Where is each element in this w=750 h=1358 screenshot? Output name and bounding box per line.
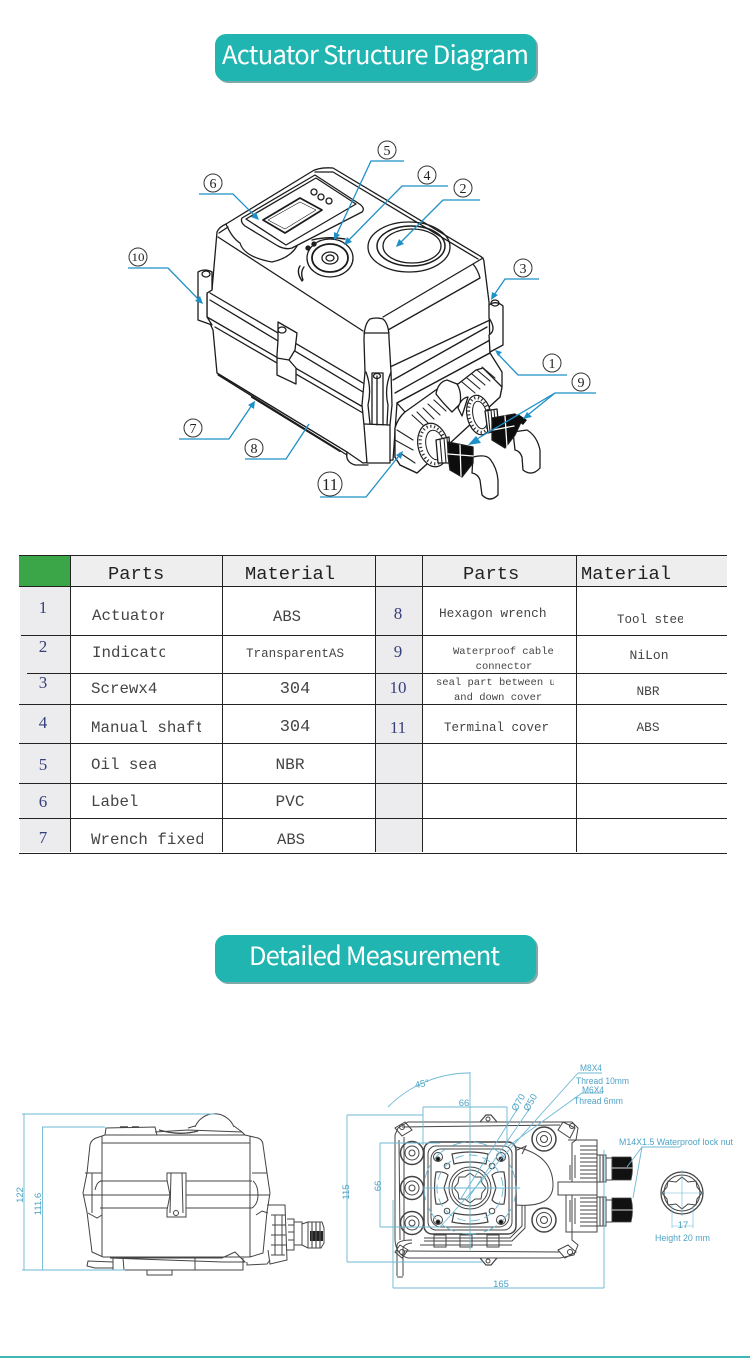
callout 5: 5 — [384, 144, 390, 159]
callout 6: 6 — [210, 177, 216, 192]
large bolts — [400, 1142, 424, 1164]
dimension and leader lines — [347, 1072, 704, 1288]
heading: Detailed Measurement — [215, 935, 538, 984]
table left rows: Manual shaft — [91, 719, 205, 737]
dimension labels: M6X4 — [582, 1085, 604, 1096]
callout 9: 9 — [578, 376, 584, 391]
table right rows: NBR — [636, 685, 660, 699]
callout 5 — [334, 141, 404, 240]
callout 2 — [396, 179, 480, 247]
side view dimension drawing — [15, 1114, 324, 1275]
dimension labels: M14X1.5 Waterproof lock nut — [619, 1137, 733, 1148]
table header: Parts — [463, 563, 519, 585]
table right rows: Hexagon wrench — [439, 606, 547, 621]
bottom view dimension drawing — [341, 1063, 733, 1290]
right lug — [489, 303, 503, 352]
heading: Detailed Measurement: Detailed Measurement — [249, 936, 500, 973]
manual shaft knob — [298, 238, 353, 281]
cable glands — [566, 1140, 597, 1232]
dimension labels: Ø50 — [522, 1092, 540, 1113]
side view actuator outline — [83, 1114, 324, 1275]
table right rows: Tool steel — [617, 613, 692, 627]
terminal cover and glands — [395, 353, 540, 499]
table right rows: and down cover — [454, 692, 542, 704]
table left rows: 1 — [39, 598, 47, 617]
table left rows: 5 — [39, 755, 47, 774]
callout 7 — [179, 401, 255, 439]
table right rows: Waterproof cable — [453, 646, 554, 658]
table left rows — [39, 598, 344, 849]
callout 8: 8 — [250, 442, 258, 457]
dimension labels: 115 — [341, 1184, 352, 1200]
table left rows: Screwx4 — [91, 680, 157, 698]
table left rows: 304 — [280, 718, 310, 737]
table left rows: 2 — [39, 637, 47, 656]
dimension 111.6: 111.6 — [33, 1193, 44, 1215]
callout 1 — [495, 350, 567, 375]
table left rows: NBR — [276, 756, 305, 774]
middle clip — [277, 322, 297, 384]
table left rows: 4 — [39, 713, 48, 732]
callout 11 — [318, 451, 403, 497]
heading: Actuator Structure Diagram: Actuator Structure Diagram — [222, 35, 529, 72]
left lug — [198, 270, 212, 325]
table left rows: Wrench fixed — [91, 831, 205, 849]
parts and material table — [19, 555, 727, 854]
table left rows: Indicator — [92, 644, 177, 662]
callout 10 — [128, 248, 203, 304]
dimension 111.6 — [33, 1127, 120, 1270]
mounting plate — [424, 1142, 516, 1234]
dimension 122 — [15, 1114, 215, 1270]
actuator 3D structure diagram — [128, 141, 596, 499]
dimension labels — [341, 1063, 733, 1290]
table left rows: Oil seal — [91, 756, 167, 774]
table left rows: 7 — [39, 828, 48, 847]
table left rows: PVC — [276, 793, 304, 811]
gland 2 — [463, 393, 495, 437]
table left rows: 3 — [39, 673, 47, 692]
table left rows: Actuator — [92, 607, 168, 625]
table right rows: Terminal cover — [444, 721, 549, 735]
callout 6 — [199, 174, 259, 220]
table left rows: 304 — [280, 680, 310, 699]
table left rows: ABS — [273, 608, 301, 626]
dimension labels: 66 — [373, 1181, 384, 1191]
indicator dome — [368, 222, 450, 272]
dimension labels: Ø70 — [510, 1092, 528, 1113]
dimension labels: Thread 10mm — [576, 1076, 629, 1087]
dimension labels: 45° — [414, 1078, 430, 1091]
callout 8 — [245, 424, 309, 459]
table right rows: 9 — [394, 642, 402, 661]
dimension labels: M8X4 — [580, 1063, 602, 1074]
callout 9 — [468, 373, 596, 445]
callout 3 — [491, 259, 539, 300]
callout 4 — [344, 166, 448, 245]
table right rows: 10 — [390, 678, 406, 697]
table grid — [19, 555, 727, 854]
callout 10: 10 — [132, 250, 144, 264]
table shading — [19, 555, 727, 852]
gland 1 — [414, 420, 452, 470]
callout 11: 11 — [322, 475, 338, 494]
table header — [108, 563, 671, 585]
callout 4: 4 — [424, 169, 430, 184]
table left rows: 6 — [39, 792, 47, 811]
bottom edge line — [0, 1356, 750, 1358]
dimension labels: Thread 6mm — [574, 1096, 623, 1107]
dimension labels: 165 — [493, 1279, 509, 1290]
dimension labels: Height 20 mm — [655, 1233, 710, 1244]
table header: Material — [581, 563, 671, 585]
table left rows: Label — [91, 793, 138, 811]
table left rows: TransparentAS — [246, 646, 344, 661]
table left rows: ABS — [277, 831, 305, 849]
bottom view actuator outline — [395, 1115, 703, 1277]
callout 2: 2 — [460, 182, 466, 197]
dimension labels: 66 — [459, 1098, 469, 1109]
indicator panel — [241, 175, 363, 249]
callout 7: 7 — [190, 422, 196, 437]
front column — [362, 318, 392, 463]
table header: Material — [245, 563, 335, 585]
dimension labels: 17 — [678, 1220, 688, 1231]
actuator housing — [198, 168, 503, 465]
table right rows: connector — [476, 661, 532, 673]
table right rows — [390, 604, 692, 737]
table right rows: 8 — [394, 604, 402, 623]
table right rows: 11 — [390, 718, 406, 737]
dimension 122: 122 — [15, 1187, 26, 1203]
table right rows: seal part between up — [436, 677, 562, 689]
table header: Parts — [108, 563, 164, 585]
table right rows: ABS — [636, 721, 660, 735]
table right rows: NiLon — [629, 648, 669, 663]
callout 3: 3 — [520, 262, 526, 277]
callout 1: 1 — [548, 357, 556, 372]
hex socket detail — [661, 1172, 703, 1214]
